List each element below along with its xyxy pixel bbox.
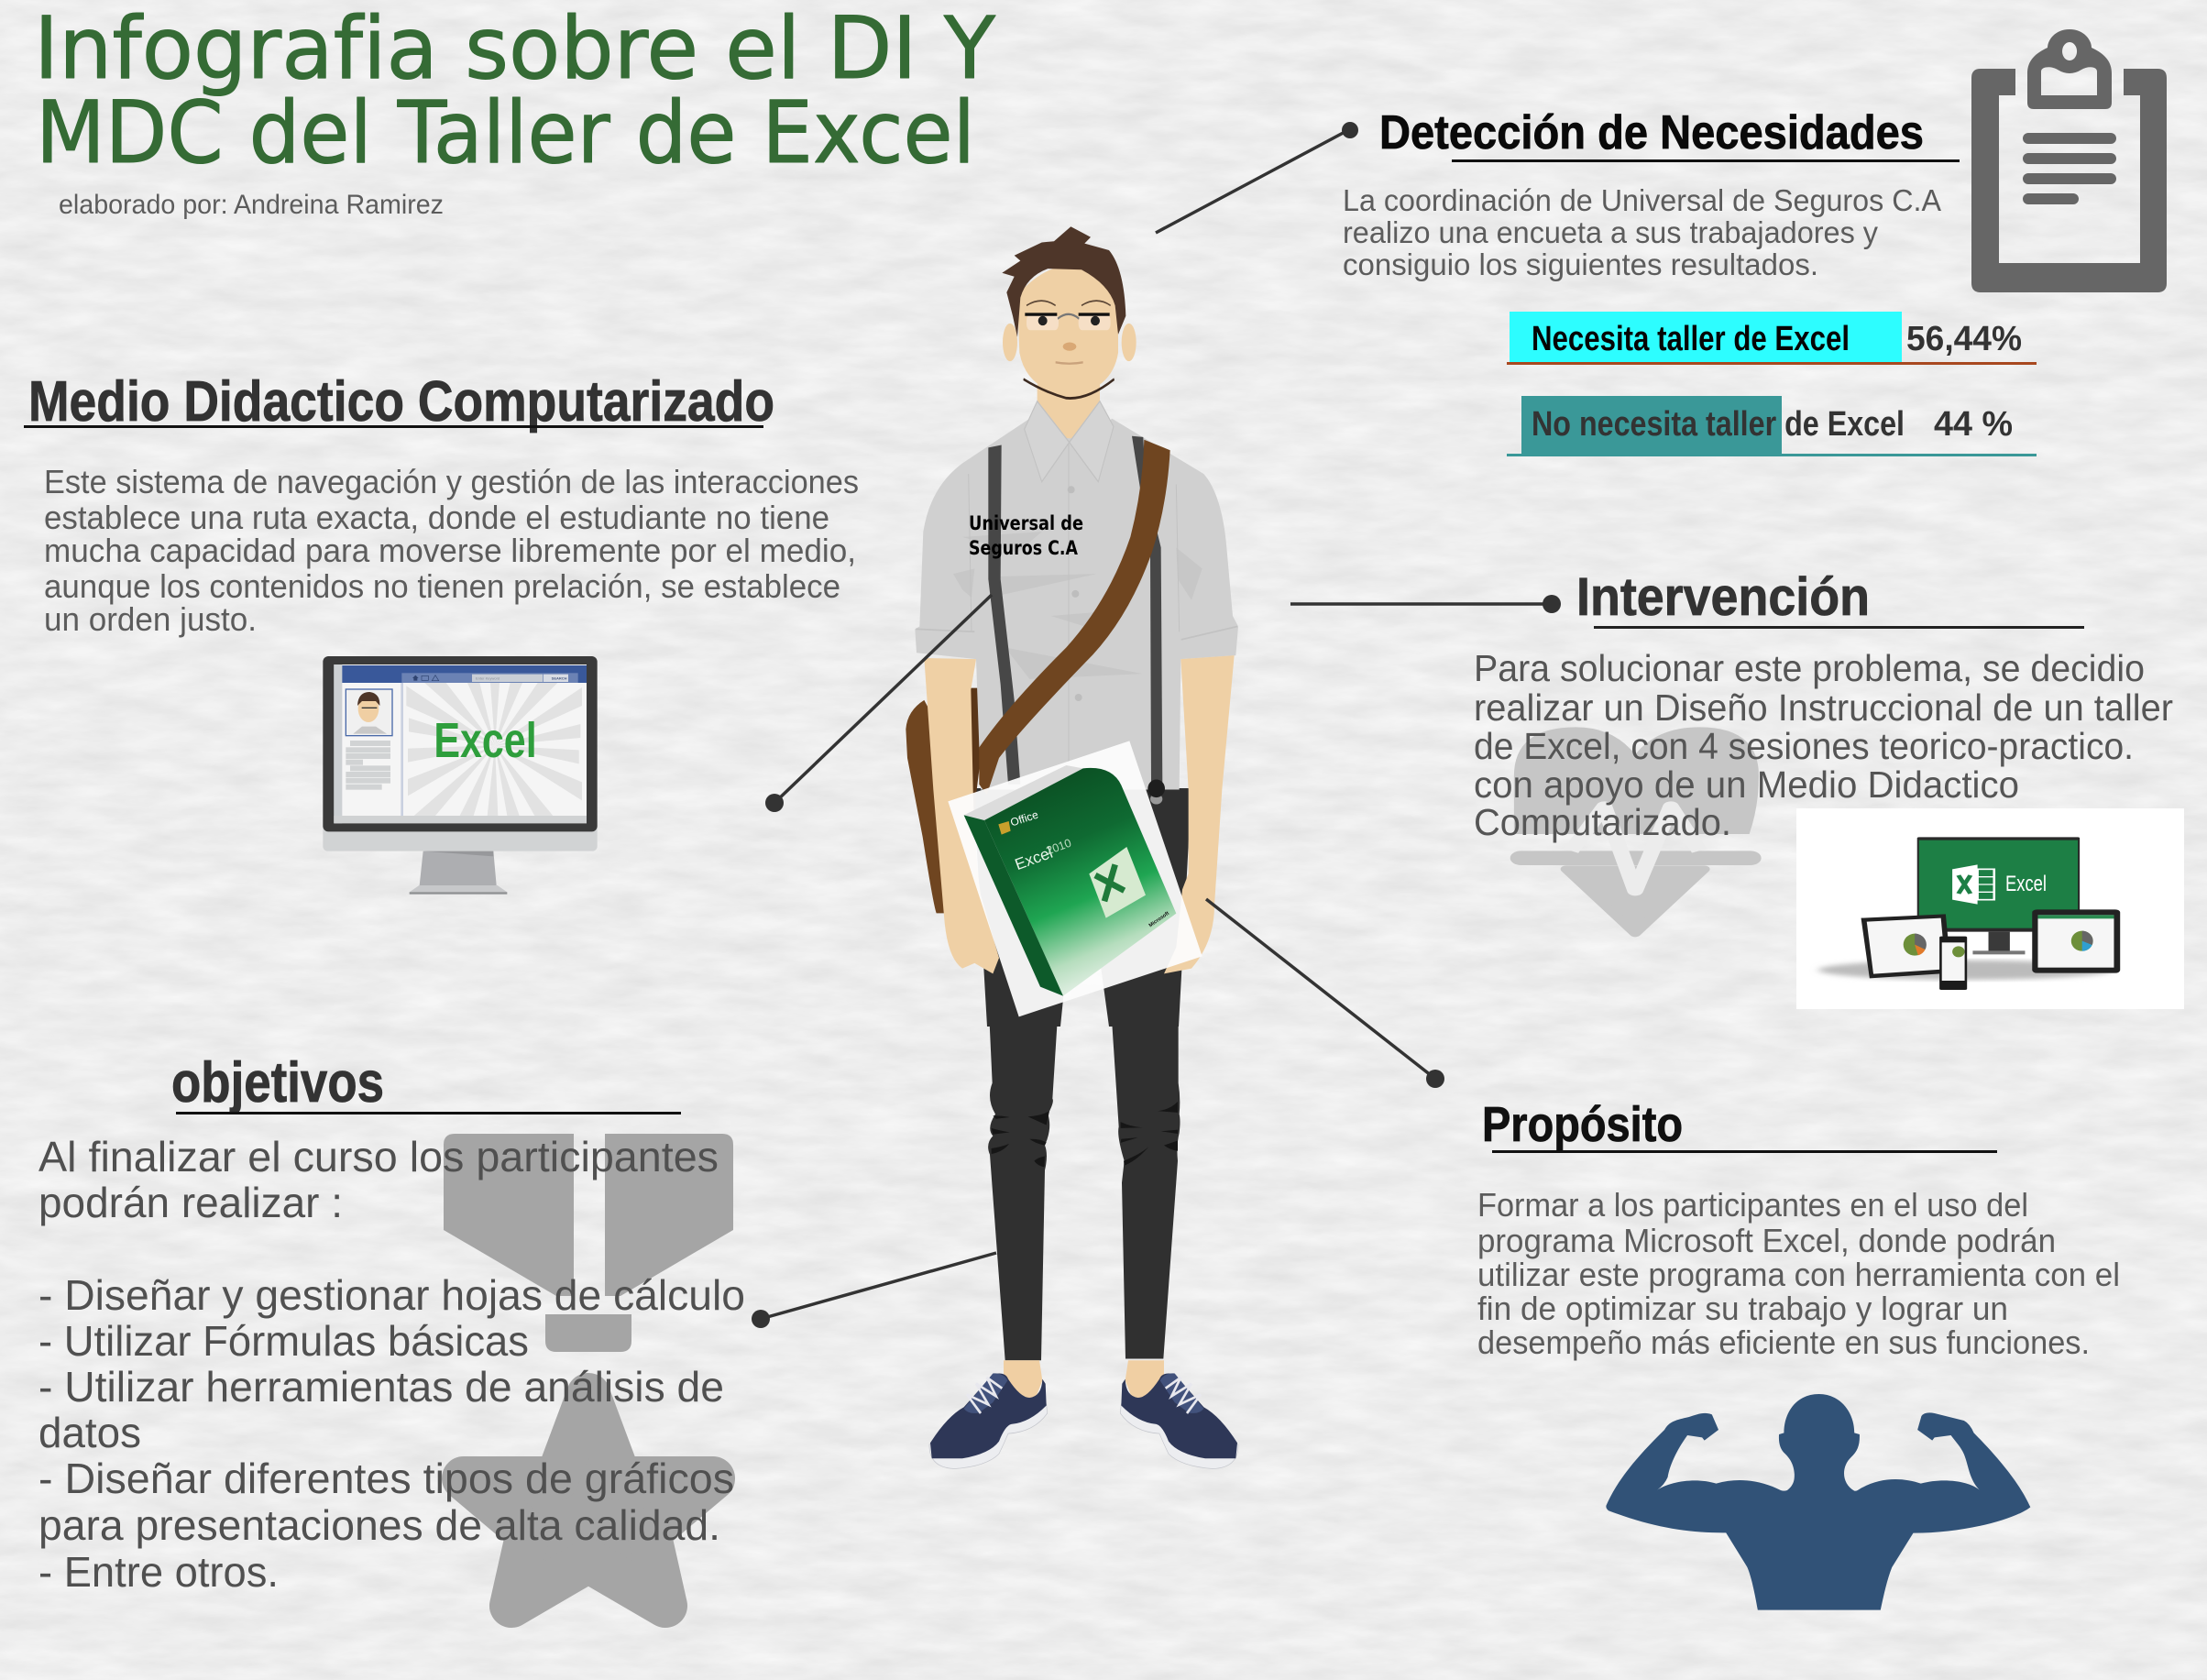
image: Office Excel 2010 box: 2010 [1045, 837, 1073, 857]
text: intervention description: Computarizado. [1474, 801, 1731, 843]
text: purpose description: utilizar este programa con herramienta con el [1477, 1256, 2120, 1293]
heading: Detección de Necesidades: Detección de Necesidades [1379, 106, 1924, 159]
heading: Medio Didactico Computarizado: Medio Didactico Computarizado [28, 370, 774, 434]
text: intervention description: realizar un Diseño Instruccional de un taller [1474, 686, 2173, 729]
torso, arms and head [906, 226, 1238, 973]
text: purpose description [1477, 1186, 2120, 1361]
panel: Intervención [1474, 567, 2173, 843]
ears [1003, 324, 1017, 361]
panel: Medio Didactico Computarizado [24, 370, 859, 638]
image: Office Excel 2010 box: Office [1009, 807, 1040, 829]
icon: desktop monitor with Excel screen: Enter Keyword [476, 675, 500, 680]
hair [1002, 226, 1125, 337]
arms [924, 658, 999, 973]
heading: Propósito: Propósito [1482, 1097, 1683, 1152]
glasses and eyes [1027, 314, 1059, 330]
text: survey description [1343, 183, 1941, 281]
text: objectives list: podrán realizar : [38, 1179, 343, 1226]
text: intervention description: Para solucionar este problema, se decidio [1474, 647, 2145, 689]
illustration: student figure [906, 226, 1238, 1469]
title: MDC del Taller de Excel [36, 83, 975, 183]
icon: desktop monitor with Excel screen [323, 656, 598, 895]
image: Office Excel 2010 box [948, 741, 1202, 1016]
text: objectives list: Al finalizar el curso los participantes [38, 1133, 719, 1180]
left shoe [929, 1360, 1048, 1469]
text: MDC description: aunque los contenidos no tienen prelación, se establece [44, 567, 840, 605]
neck [1038, 384, 1100, 458]
text: survey description: realizo una encueta a sus trabajadores y [1343, 215, 1878, 249]
panel: objetivos [38, 1051, 745, 1596]
text: intervention description: con apoyo de un Medio Didactico [1474, 763, 2019, 806]
bar: no necesita taller 44%: 44 % [1934, 405, 2013, 444]
text: objectives list: - Entre otros. [38, 1548, 279, 1596]
text: intervention description [1474, 647, 2173, 843]
panel: Detección de Necesidades [1343, 106, 2037, 456]
text: MDC description: establece una ruta exacta, donde el estudiante no tiene [44, 499, 829, 536]
suspenders [988, 436, 1162, 785]
text: purpose description: programa Microsoft Excel, donde podrán [1477, 1222, 2056, 1259]
text: MDC description [44, 463, 859, 638]
text: MDC description: un orden justo. [44, 600, 257, 638]
image: Office Excel 2010 box: Microsoft [1148, 911, 1170, 928]
text: objectives list: - Utilizar herramientas de análisis de [38, 1363, 724, 1411]
text: MDC description: Este sistema de navegación y gestión de las interacciones [44, 463, 859, 500]
text: shirt label: Seguros C.A [969, 537, 1079, 559]
text: purpose description: desempeño más eficiente en sus funciones. [1477, 1323, 2090, 1361]
title [34, 0, 996, 183]
heading: Intervención: Intervención [1576, 567, 1870, 627]
text: shirt label: Universal de [969, 512, 1083, 534]
face [1017, 266, 1118, 396]
icon: medal [444, 1134, 733, 1606]
text: objectives list: - Utilizar Fórmulas básicas [38, 1317, 529, 1365]
shirt [915, 419, 1238, 789]
text: survey description: consiguio los siguientes resultados. [1343, 247, 1818, 281]
legs and shoes [929, 788, 1238, 1469]
icon: strong man silhouette [1606, 1394, 2030, 1610]
bar: necesita taller 56,44%: Necesita taller de Excel [1532, 320, 1850, 358]
text: objectives list: datos [38, 1409, 141, 1456]
heading: objetivos: objetivos [171, 1051, 384, 1115]
text: survey description: La coordinación de Universal de Seguros C.A [1343, 183, 1941, 217]
image: Office Excel 2010 box: Excel [1013, 843, 1055, 873]
text: objectives list: para presentaciones de alta calidad. [38, 1501, 720, 1549]
text: MDC description: mucha capacidad para moverse libremente por el medio, [44, 532, 856, 569]
bar: necesita taller 56,44%: 56,44% [1906, 320, 2022, 358]
bar: necesita taller 56,44% [1507, 312, 2037, 365]
bag [906, 700, 944, 913]
text: objectives list [38, 1133, 745, 1596]
icon: clipboard [1971, 29, 2167, 292]
label: Excel on screen: Excel [434, 714, 537, 768]
text: purpose description: Formar a los participantes en el uso del [1477, 1186, 2028, 1224]
title: Infografia sobre el DI Y [34, 0, 996, 99]
Excel logo on devices [1952, 864, 1994, 905]
bar: no necesita taller 44%: No necesita taller de Excel [1532, 405, 1905, 444]
collar [1025, 401, 1114, 482]
text: objectives list: - Diseñar diferentes tipos de gráficos [38, 1455, 734, 1502]
bar: no necesita taller 44% [1507, 396, 2037, 456]
right shoe [1120, 1360, 1238, 1469]
icon: desktop monitor with Excel screen: SEARCH [552, 675, 567, 680]
panel: Propósito [1477, 1097, 2120, 1361]
text: intervention description: de Excel, con 4 sesiones teorico-practico. [1474, 725, 2134, 767]
label: Excel on device: Excel [2005, 872, 2047, 896]
image: Excel on multiple devices [1796, 808, 2184, 1009]
text: purpose description: fin de optimizar su trabajo y lograr un [1477, 1290, 2008, 1327]
text: shirt label [969, 512, 1083, 559]
connector lines and dots [752, 122, 1561, 1328]
bag strap [979, 440, 1170, 795]
icon: heartbeat [1510, 727, 1762, 933]
text: objectives list: - Diseñar y gestionar hojas de cálculo [38, 1271, 745, 1319]
subtitle: author: elaborado por: Andreina Ramirez [59, 190, 444, 220]
